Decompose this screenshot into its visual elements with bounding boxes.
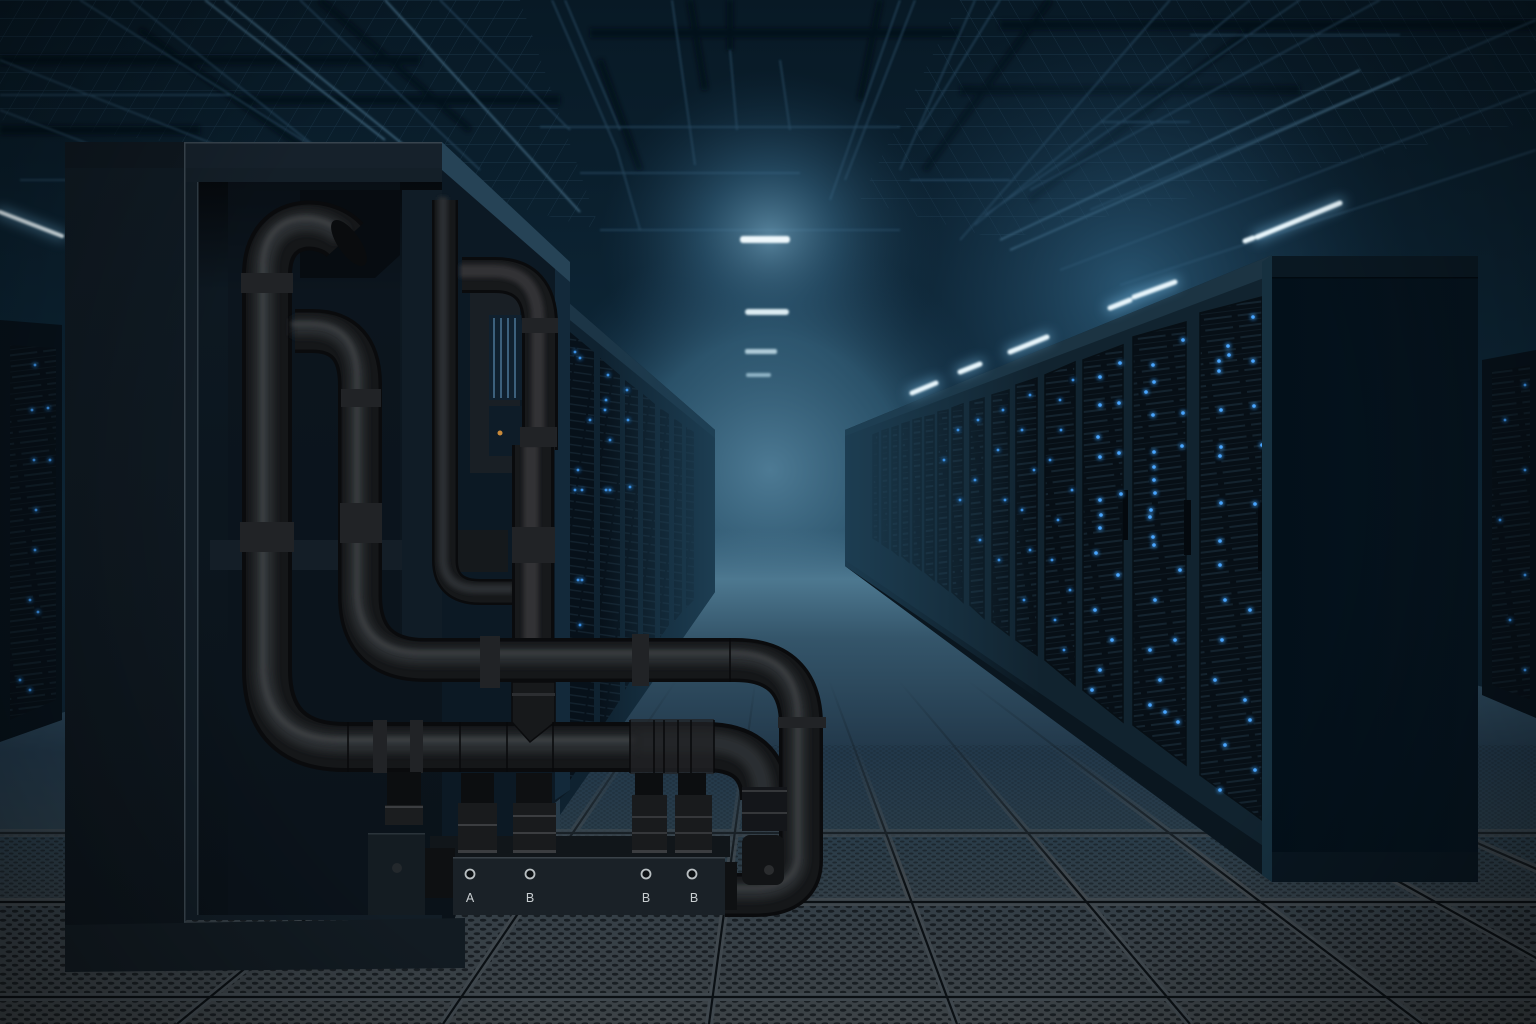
ceiling structure <box>0 0 1536 285</box>
corridor fog <box>530 230 1010 710</box>
ceiling lights: centre aisle <box>740 236 790 377</box>
floor with perforated tiles <box>0 530 1536 1024</box>
stub ring set 3 <box>513 773 556 853</box>
stub ring set 5 <box>675 773 712 853</box>
port B 1 <box>526 870 534 905</box>
pipe network <box>240 197 826 895</box>
ceiling haze <box>560 0 1536 600</box>
server doors <box>873 297 1262 820</box>
corner pillar <box>65 142 185 932</box>
pipe: right riser <box>460 271 540 700</box>
left server row <box>560 295 715 815</box>
cooling unit cabinet <box>65 142 570 972</box>
far left rack <box>0 320 62 742</box>
top cap <box>185 142 442 168</box>
pipe: return loop <box>292 324 801 895</box>
ceiling lights: right strips <box>912 203 1340 393</box>
stub ring set 4 <box>632 773 667 853</box>
pipe: small bypass <box>443 197 515 592</box>
ceiling light: left strip <box>0 212 62 236</box>
port B 2: B <box>642 891 650 905</box>
stub ring set 1 <box>385 772 423 825</box>
rack end panel <box>1262 255 1478 882</box>
left junction box <box>368 833 455 915</box>
side panel <box>442 170 570 900</box>
manifold back plate <box>430 836 730 857</box>
port A: A <box>466 891 475 905</box>
inner bay <box>185 168 442 920</box>
door handles <box>1123 490 1264 571</box>
connector stubs <box>385 772 787 885</box>
port B 3: B <box>690 891 698 905</box>
manifold <box>453 857 737 915</box>
far right rack <box>1482 350 1536 718</box>
port B 1: B <box>526 891 534 905</box>
stub ring set 2 <box>458 773 497 853</box>
pipe collars <box>240 273 826 774</box>
collar ring lines <box>348 638 730 773</box>
pipe: main upper left <box>263 215 640 747</box>
right server row <box>845 255 1272 882</box>
pipe: tee drop with pointed joint <box>512 682 555 742</box>
base plinth <box>65 918 465 972</box>
blue server LEDs <box>20 317 1525 790</box>
port A <box>466 870 475 905</box>
stub ring set 6 <box>742 787 787 885</box>
control panel <box>458 287 523 572</box>
pipe: lower bend <box>638 742 765 800</box>
port B 3 <box>688 870 698 905</box>
port B 2 <box>642 870 650 905</box>
